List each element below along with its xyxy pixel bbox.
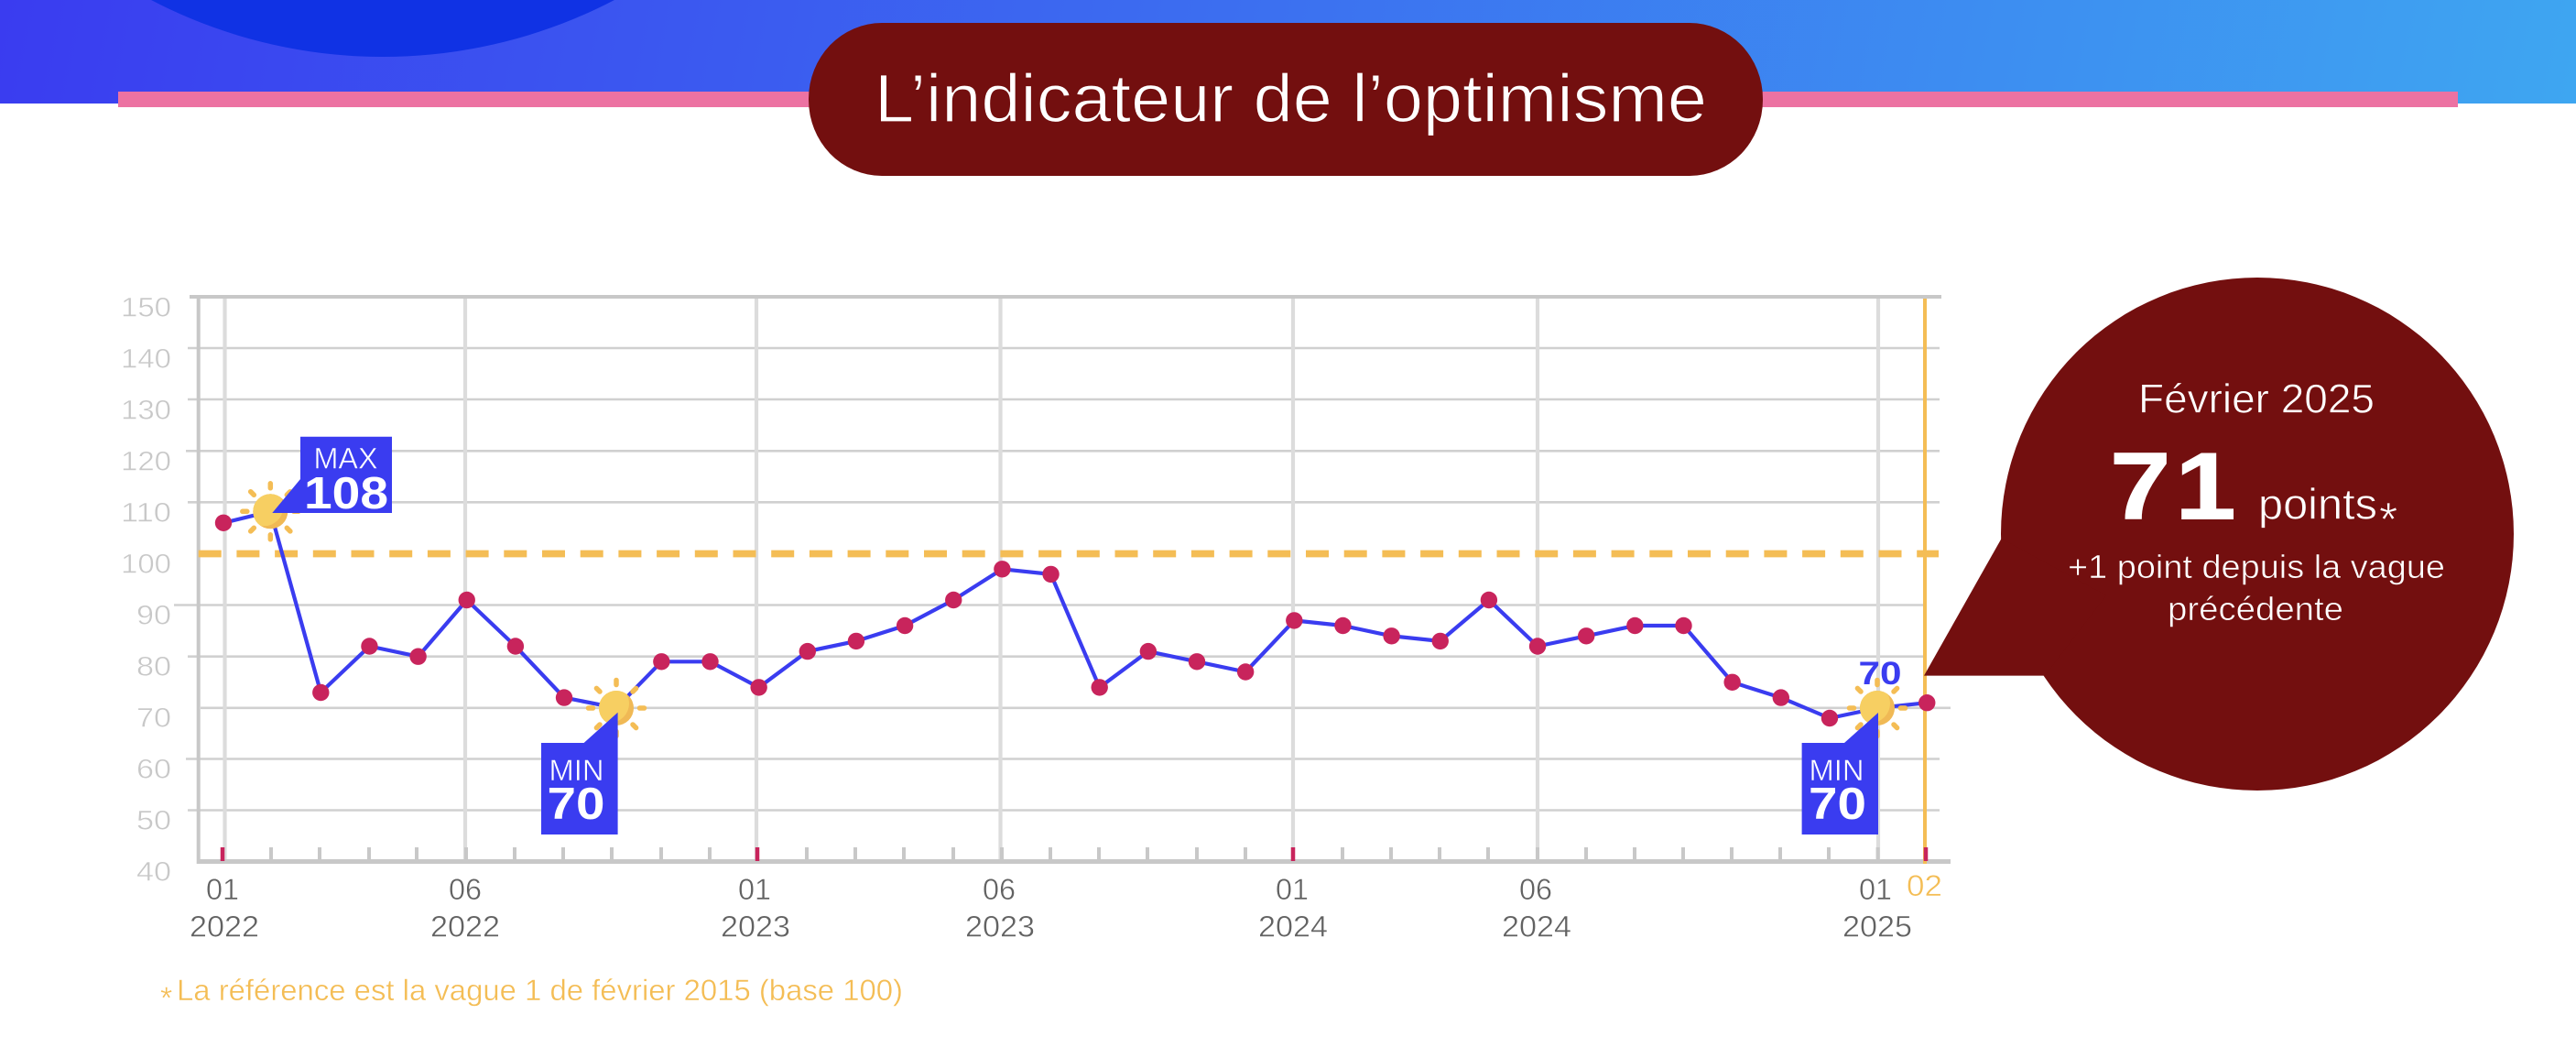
value label 70: 70 xyxy=(1859,656,1901,692)
grid lines xyxy=(174,348,1951,810)
y axis labels: 100 xyxy=(121,550,171,580)
title: L’indicateur de l’optimisme xyxy=(875,60,1707,136)
reference line at 100 xyxy=(199,551,1939,557)
x axis labels: 01 xyxy=(738,873,771,906)
data points xyxy=(215,515,1935,726)
icon: sun at maximum xyxy=(243,484,299,540)
callout: MIN 70 (2022): 70 xyxy=(548,780,604,829)
callout bubble: Février 2025: points xyxy=(2258,480,2377,529)
x axis labels: 2025 xyxy=(1842,911,1912,943)
header band xyxy=(0,0,2576,107)
x axis labels xyxy=(190,869,1942,943)
x axis labels: 2024 xyxy=(1502,911,1571,943)
callout: MIN 70 (2022): MIN xyxy=(549,754,604,787)
y axis labels: 90 xyxy=(136,601,171,631)
callout bubble: Février 2025: précédente xyxy=(2168,590,2343,627)
x axis labels: 2022 xyxy=(430,911,500,943)
x axis labels: 01 xyxy=(206,873,239,906)
line chart xyxy=(121,293,1951,943)
x axis labels: 06 xyxy=(983,873,1016,906)
footnote: * xyxy=(160,981,172,1016)
callout bubble: Février 2025: * xyxy=(2379,494,2397,547)
x axis labels: 02 xyxy=(1907,869,1942,902)
x axis labels: 2022 xyxy=(190,911,259,943)
decorative dark circle xyxy=(0,0,884,57)
x axis labels: 2023 xyxy=(965,911,1035,943)
y axis labels: 110 xyxy=(121,498,171,529)
y axis labels: 40 xyxy=(136,857,171,888)
y axis labels: 50 xyxy=(136,806,171,836)
callout: MIN 70 (2022) xyxy=(541,713,618,834)
y axis labels: 70 xyxy=(136,704,171,734)
title xyxy=(809,23,1763,176)
callout bubble: Février 2025: +1 point depuis la vague xyxy=(2068,548,2445,585)
callout: MIN 70 (2025) xyxy=(1802,713,1878,834)
y axis labels: 150 xyxy=(121,293,171,323)
y axis labels: 130 xyxy=(121,396,171,426)
y axis labels: 80 xyxy=(136,652,171,682)
red year ticks xyxy=(223,847,1926,861)
callout: MIN 70 (2025): 70 xyxy=(1809,780,1866,829)
y axis labels: 140 xyxy=(121,344,171,375)
callout bubble: Février 2025 xyxy=(1924,278,2514,791)
callout: MIN 70 (2025): MIN xyxy=(1810,754,1864,787)
y axis labels xyxy=(121,293,171,888)
callout: MAX 108 xyxy=(272,437,392,518)
axes and ticks xyxy=(190,297,1951,864)
x axis labels: 01 xyxy=(1859,873,1892,906)
x axis labels: 2023 xyxy=(721,911,790,943)
callout bubble: Février 2025: Février 2025 xyxy=(2138,377,2375,422)
x axis labels: 01 xyxy=(1276,873,1309,906)
x axis labels: 06 xyxy=(449,873,482,906)
footnote: La référence est la vague 1 de février 2015 (base 100) xyxy=(177,974,903,1007)
data line xyxy=(223,511,1927,718)
pink bar xyxy=(118,92,2458,107)
icon: sun at minimum 2025 xyxy=(1850,680,1905,736)
x axis labels: 06 xyxy=(1519,873,1552,906)
y axis labels: 120 xyxy=(121,447,171,477)
y axis labels: 60 xyxy=(136,755,171,785)
vertical month lines xyxy=(225,297,1878,864)
callout: MAX 108: MAX xyxy=(313,442,377,475)
icon: sun at minimum 2022 xyxy=(588,680,645,736)
x axis labels: 2024 xyxy=(1258,911,1328,943)
callout: MAX 108: 108 xyxy=(304,469,388,518)
current month line xyxy=(1923,299,1927,864)
callout bubble: Février 2025: 71 xyxy=(2110,433,2236,540)
